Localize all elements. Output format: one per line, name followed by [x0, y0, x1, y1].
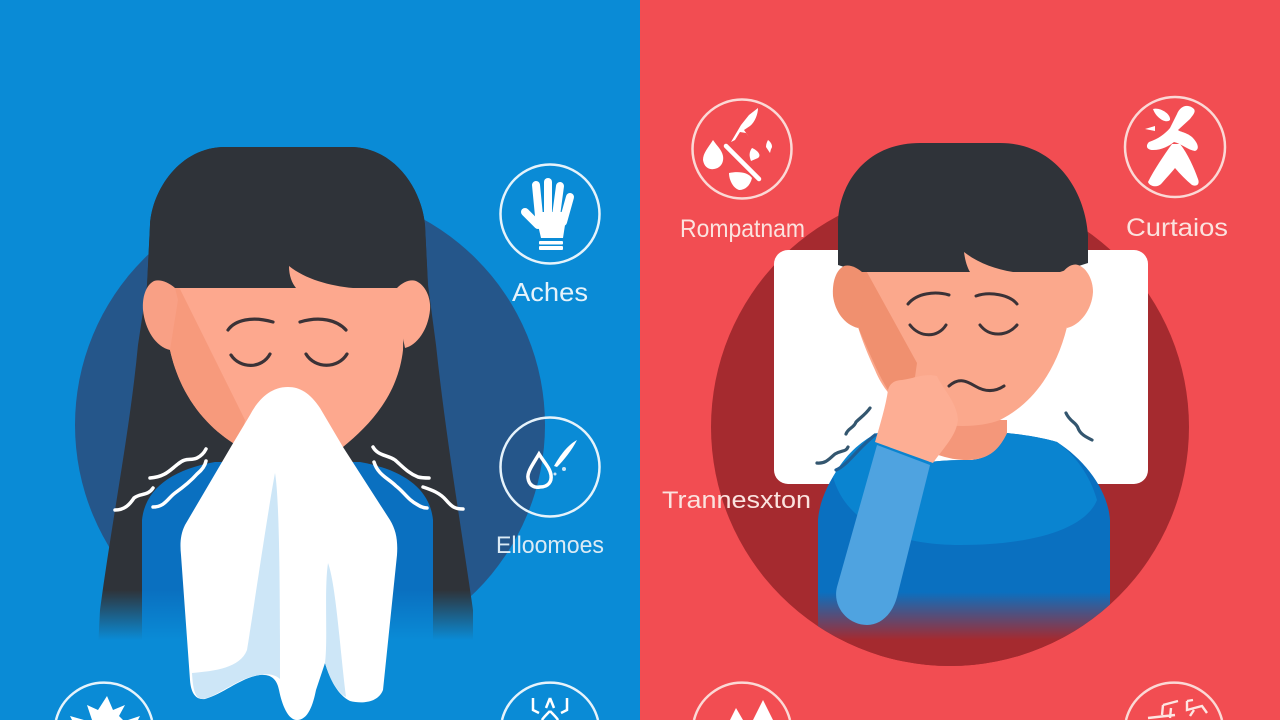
- hand: [875, 375, 958, 463]
- shirt: [818, 433, 1110, 670]
- icon: peaks: [694, 683, 790, 720]
- face shadow: [858, 265, 917, 390]
- left ear: [833, 265, 865, 328]
- sweater: [142, 462, 433, 650]
- bottom fade: [0, 590, 640, 655]
- shiver lines left: [115, 449, 206, 510]
- sleeve: [836, 445, 930, 625]
- icon: drops and pin: [692, 100, 792, 198]
- neck: [925, 420, 1007, 460]
- right ear: [395, 280, 430, 348]
- icon: crossed symbol: [1125, 97, 1225, 197]
- hair: [838, 143, 1088, 272]
- tissue fold left: [192, 473, 280, 699]
- icon: burst: [56, 683, 152, 720]
- label: Rompatnam: Rompatnam: [680, 215, 805, 243]
- eyebrows, closed eyes and wavy mouth: [908, 293, 1017, 390]
- shiver lines right: [373, 447, 463, 509]
- face shadow: [170, 285, 245, 447]
- fringe: [147, 147, 428, 288]
- label: Curtaios: Curtaios: [1126, 214, 1228, 242]
- dark blue backdrop circle: [75, 190, 545, 660]
- label: Elloomoes: Elloomoes: [496, 532, 604, 559]
- label: Trannesxton: Trannesxton: [662, 487, 811, 514]
- face: [170, 260, 405, 447]
- icon: hand aches: [500, 164, 600, 264]
- figure: woman with tissue: [0, 147, 640, 720]
- face: [858, 245, 1067, 426]
- white pillow: [774, 250, 1148, 484]
- icon: bottom droplet: [502, 683, 598, 720]
- icon: droplet: [500, 418, 600, 516]
- panel: blue left background: [0, 0, 640, 720]
- right ear: [1055, 265, 1093, 328]
- eyebrows and closed eyes: [228, 319, 347, 365]
- icon: squiggle mark: [1126, 683, 1222, 720]
- figure: boy holding his face: [711, 143, 1189, 670]
- tissue fold right: [325, 563, 346, 697]
- tissue: [180, 387, 397, 720]
- dark red backdrop circle: [711, 188, 1189, 666]
- long hair: [98, 147, 473, 650]
- label: Aches: Aches: [512, 277, 588, 307]
- panel: red right background: [640, 0, 1280, 720]
- tremble marks: [817, 408, 1092, 470]
- left ear: [143, 280, 178, 350]
